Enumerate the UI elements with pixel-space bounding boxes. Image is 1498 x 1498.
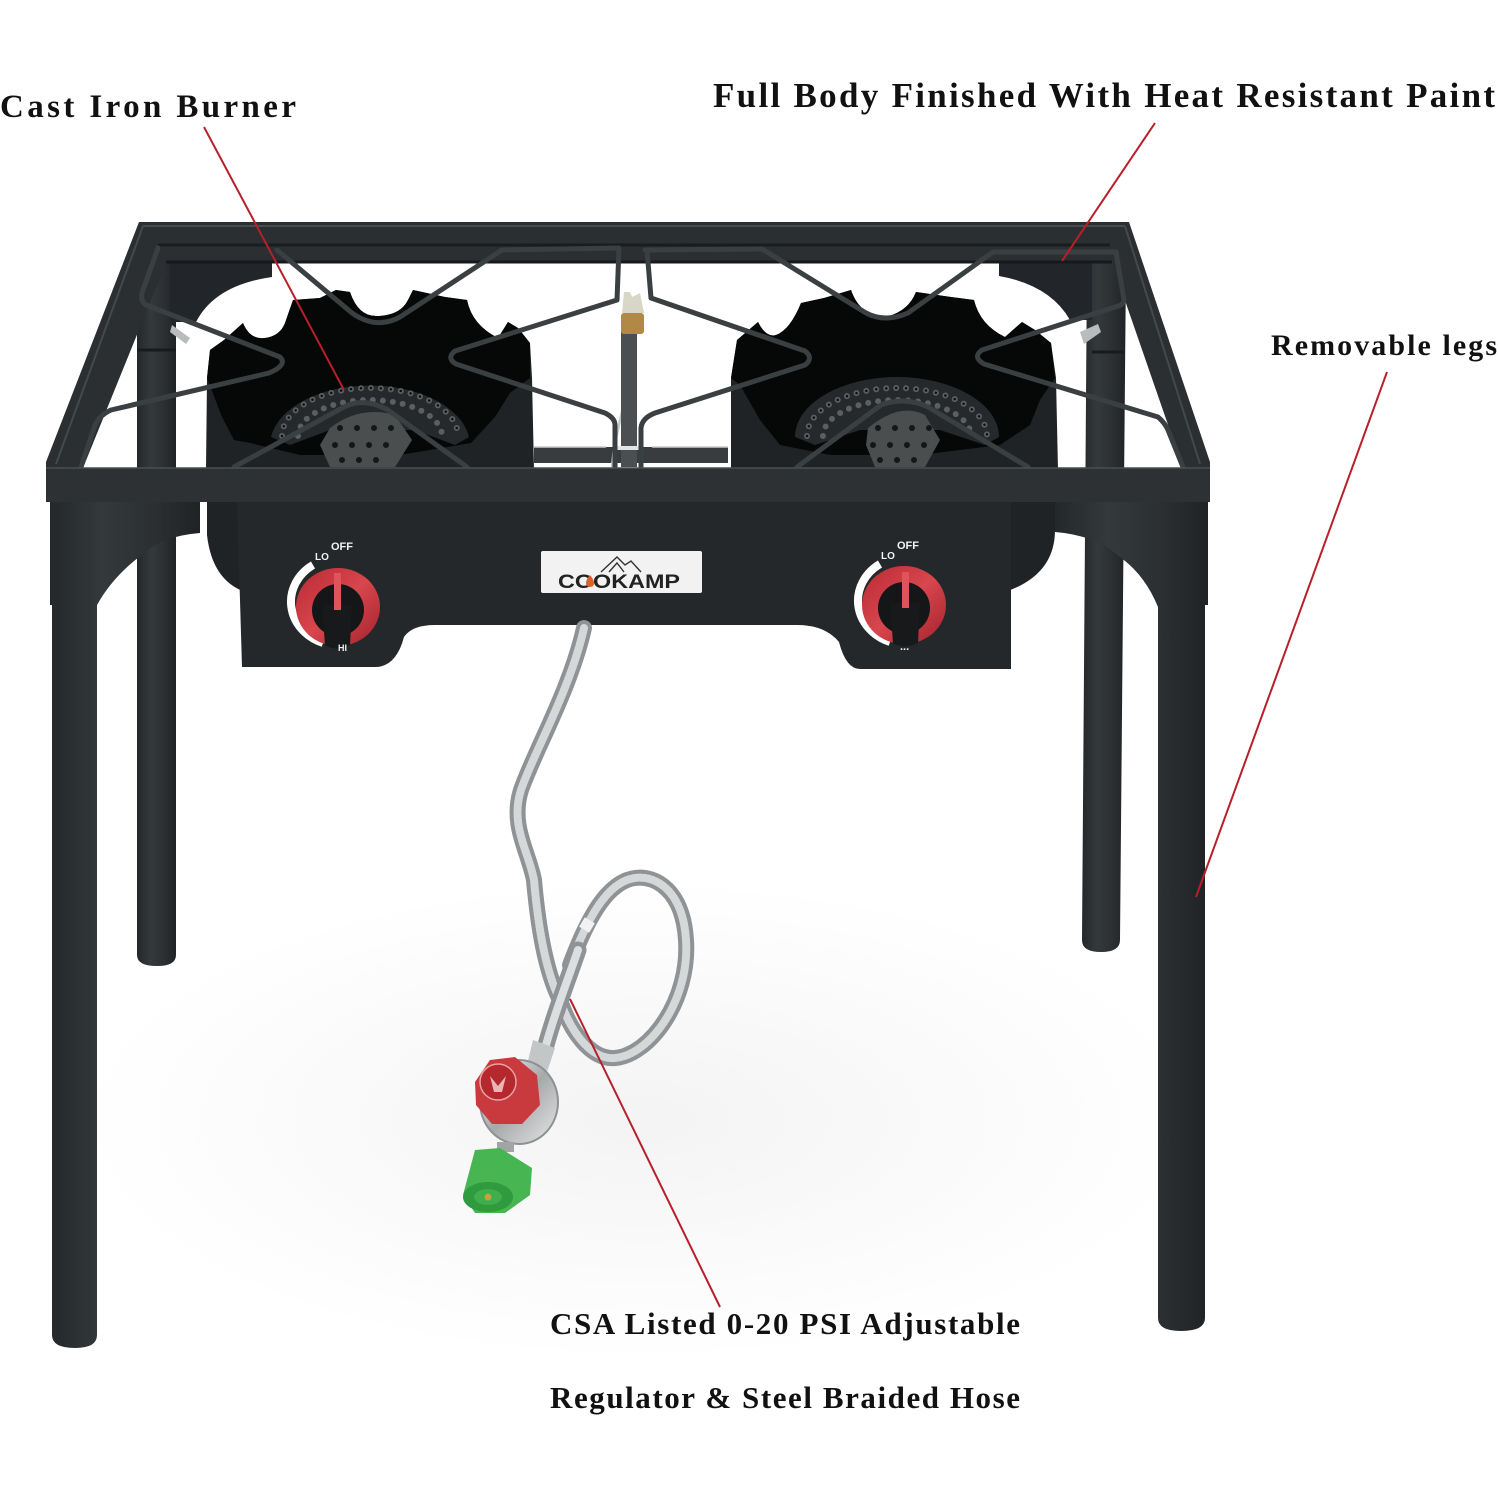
icon: right burner housing [731, 290, 1058, 470]
callout: removable legs [1196, 329, 1497, 897]
callout: removable legs: Removable legs [1271, 329, 1497, 362]
icon: right cast iron burner [795, 377, 999, 467]
callout: regulator and hose [550, 999, 1020, 1415]
icon: housing lower bulges [207, 500, 1055, 592]
icon: wire pot supports [81, 248, 1183, 467]
icon: front left leg [50, 502, 200, 1348]
icon: front frame bar [46, 468, 1210, 502]
icon: right knob: ... [900, 641, 909, 653]
icon: regulator [463, 1040, 558, 1213]
icon: housing corner brackets [170, 262, 1092, 322]
icon: steel braided hose [518, 628, 686, 1060]
logo plate [541, 551, 702, 593]
callout: regulator and hose: Regulator & Steel Braided Hose [550, 1380, 1020, 1415]
icon: left cast iron burner [271, 385, 469, 467]
icon: right knob: LO [881, 551, 895, 562]
callout: full body paint: Full Body Finished With Heat Resistant Paint [713, 76, 1495, 115]
callout: cast iron burner [0, 89, 344, 390]
icon: back legs [137, 262, 1126, 966]
floor shadow [80, 880, 1200, 1360]
icon: top frame [46, 222, 1210, 470]
icon: control panel [237, 500, 1011, 669]
icon: left knob: OFF [331, 541, 353, 553]
icon: left knob: HI [338, 643, 347, 653]
icon: central gas pipe and bracket [534, 292, 728, 467]
callout: cast iron burner: Cast Iron Burner [0, 89, 296, 125]
icon: left knob: LO [315, 552, 329, 563]
icon: right knob [858, 540, 946, 653]
icon: left knob [291, 541, 380, 653]
icon: front right leg [1055, 502, 1208, 1331]
icon: thumb screws [170, 324, 1101, 344]
callout: regulator and hose: CSA Listed 0-20 PSI Adjustable [550, 1306, 1020, 1341]
logo plate: COOKAMP [558, 572, 680, 593]
icon: right knob: OFF [897, 540, 919, 552]
icon: left burner housing [206, 290, 534, 470]
callout: full body paint [713, 76, 1495, 261]
